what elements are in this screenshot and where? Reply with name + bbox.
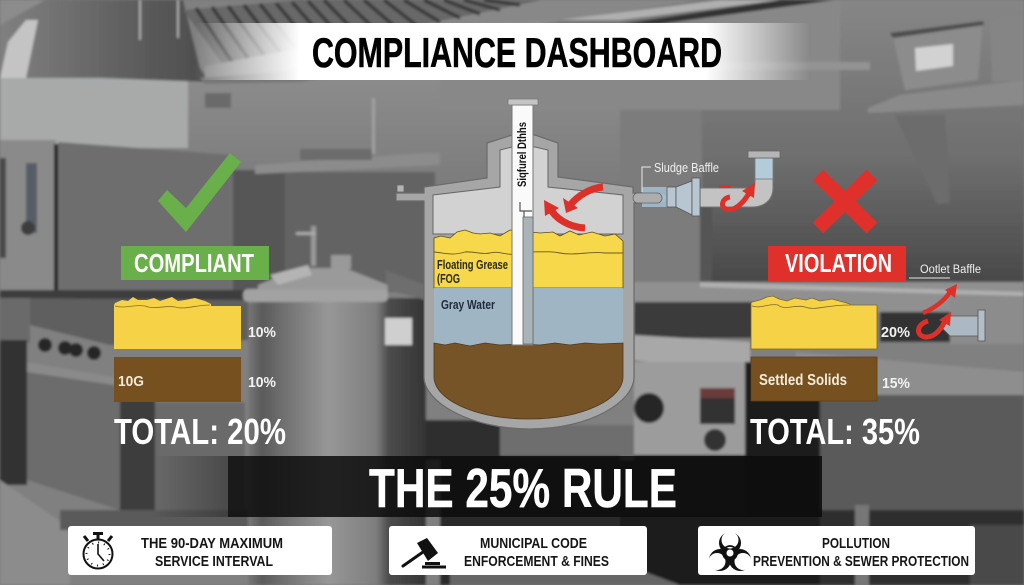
card text: THE 90-DAY MAXIMUM xyxy=(141,535,283,552)
grease layer xyxy=(434,230,623,288)
panel: compliant xyxy=(114,153,286,452)
title: COMPLIANCE DASHBOARD xyxy=(312,29,722,76)
settled solids layer xyxy=(434,343,623,419)
card text line 2: ENFORCEMENT & FINES xyxy=(464,553,609,570)
tank diagram xyxy=(396,99,667,429)
label: floating grease: Floating Grease xyxy=(437,257,508,272)
grease percentage: 20% xyxy=(881,324,910,341)
solids bar xyxy=(114,357,241,402)
icon: stopwatch xyxy=(84,532,112,568)
card: pollution xyxy=(698,526,975,575)
outlet stub xyxy=(943,310,985,341)
arrow: inflow xyxy=(563,187,603,213)
arrow: recirculation xyxy=(544,200,585,228)
card: service interval xyxy=(68,526,332,575)
solids bar xyxy=(751,357,877,401)
icon: biohazard xyxy=(708,532,752,571)
compliant badge: COMPLIANT xyxy=(134,248,254,278)
total violation: TOTAL: 35% xyxy=(750,411,920,452)
label: FOG: (FOG xyxy=(437,271,460,286)
solids percentage: 15% xyxy=(882,375,910,392)
flange lug xyxy=(397,185,404,192)
icon: gavel xyxy=(403,538,446,568)
callout: outlet baffle: Ootlet Baffle xyxy=(920,264,981,276)
panel: violation xyxy=(750,175,985,452)
icon: check mark xyxy=(158,153,241,232)
outlet pipe xyxy=(633,151,780,216)
tank shell xyxy=(396,135,667,429)
arrow: upper xyxy=(923,284,957,313)
callout: sludge baffle xyxy=(642,160,719,192)
grease bar xyxy=(751,296,877,349)
total compliant: TOTAL: 20% xyxy=(114,411,286,452)
icon: X mark xyxy=(818,175,872,228)
label: gray water: Gray Water xyxy=(441,297,495,312)
solids bar: Settled Solids xyxy=(759,372,847,389)
card: enforcement xyxy=(389,526,647,575)
rule band xyxy=(150,456,822,519)
card text line 2: SERVICE INTERVAL xyxy=(155,553,273,570)
grease percentage: 10% xyxy=(248,324,276,341)
solids percentage: 10% xyxy=(248,374,276,391)
violation badge: VIOLATION xyxy=(785,248,892,278)
gray water layer xyxy=(434,288,623,345)
grease bar xyxy=(114,297,241,349)
rule heading: THE 25% RULE xyxy=(369,457,677,519)
tube label: Siqfurel Dthhs xyxy=(517,122,529,187)
callout: sludge baffle: Sludge Baffle xyxy=(654,160,719,175)
card text: POLLUTION xyxy=(822,535,890,552)
tank interior air space xyxy=(433,147,623,234)
title banner xyxy=(195,23,810,80)
grease inner line xyxy=(434,252,623,254)
measuring tube xyxy=(508,99,538,345)
arrow: lower hook xyxy=(919,312,951,337)
card text line 2: PREVENTION & SEWER PROTECTION xyxy=(753,553,969,570)
violation badge xyxy=(768,246,906,281)
solids bar: 10G xyxy=(118,374,144,390)
card text: MUNICIPAL CODE xyxy=(480,535,587,552)
